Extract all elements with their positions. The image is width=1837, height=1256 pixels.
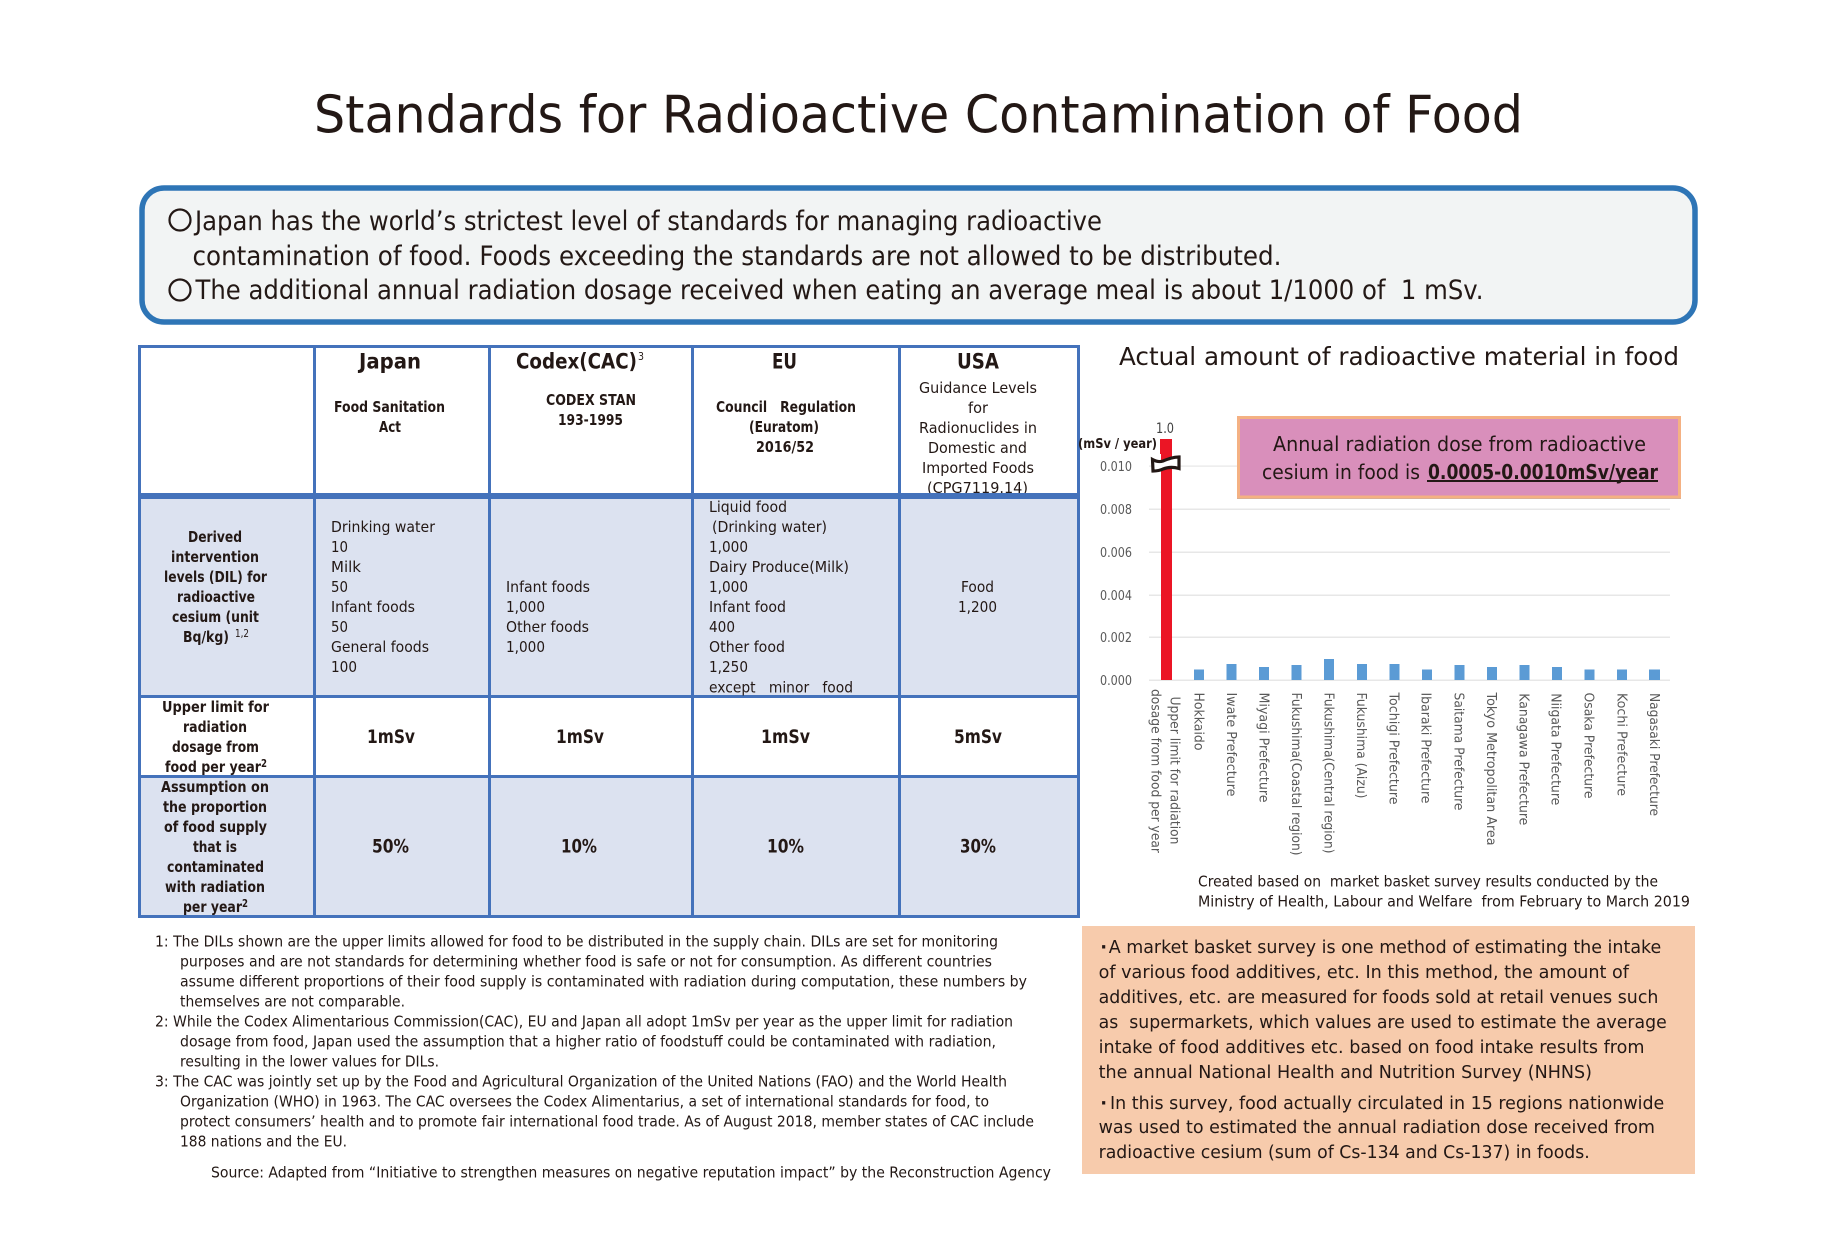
cell: EU DIL values: Infant food bbox=[709, 598, 786, 616]
footnote 2: dosage from food, Japan used the assumption that a higher ratio of foodstuff could be contaminated with radiation, bbox=[180, 1032, 996, 1050]
cell: Codex DIL values: 1,000 bbox=[506, 598, 545, 616]
cell: Japan DIL values: 50 bbox=[331, 618, 348, 636]
cell: Codex DIL values: 1,000 bbox=[506, 638, 545, 656]
row label: upper limit bbox=[162, 698, 270, 776]
paragraph: market basket survey: intake of food additives etc. based on food intake results from bbox=[1099, 1037, 1644, 1058]
paragraph: market basket survey: additives, etc. are measured for foods sold at retail venues such bbox=[1099, 987, 1658, 1008]
header: Codex bbox=[516, 350, 644, 429]
header: Codex: 3 bbox=[638, 351, 644, 363]
footnote 2 bbox=[155, 1012, 1013, 1070]
paragraph: market basket survey bbox=[1099, 937, 1667, 1083]
row label: assumption bbox=[161, 778, 269, 916]
footnote 3: 188 nations and the EU. bbox=[180, 1132, 347, 1150]
bar chart: radiation dose by region bbox=[1078, 421, 1670, 856]
cell: EU DIL values: 1,000 bbox=[709, 538, 748, 556]
cell: Codex DIL values: Other foods bbox=[506, 618, 589, 636]
footnote 2: resulting in the lower values for DILs. bbox=[180, 1052, 439, 1070]
row label: derived intervention levels: Bq/kg) bbox=[183, 628, 229, 646]
cell: EU DIL values: 1,250 bbox=[709, 658, 748, 676]
cell: Japan DIL values: Milk bbox=[331, 558, 361, 576]
panel background bbox=[142, 188, 1695, 322]
footnote 1 bbox=[155, 932, 1027, 1010]
header: EU: EU bbox=[772, 350, 797, 374]
source note: Source: Adapted from “Initiative to strengthen measures on negative reputation impact” by the Reconstruction Agency bbox=[211, 1164, 1051, 1182]
chart source note: Created based on market basket survey results conducted by the bbox=[1198, 872, 1658, 890]
footnote 1: 1: The DILs shown are the upper limits allowed for food to be distributed in the supply chain. DILs are set for monitoring bbox=[155, 932, 998, 950]
cell: Japan DIL values: 100 bbox=[331, 658, 357, 676]
cell: EU DIL values: (Drinking water) bbox=[712, 518, 827, 536]
x axis labels: Osaka Prefecture bbox=[1580, 692, 1596, 798]
footnote 1: themselves are not comparable. bbox=[180, 992, 405, 1010]
table grid bbox=[138, 345, 1080, 918]
row label: derived intervention levels: Derived bbox=[188, 528, 242, 546]
y axis labels: 0.000 bbox=[1100, 673, 1132, 689]
row label: upper limit: 2 bbox=[261, 758, 267, 770]
paragraph: market basket survey: as supermarkets, which values are used to estimate the average bbox=[1099, 1012, 1667, 1033]
row label: derived intervention levels: 1,2 bbox=[235, 628, 249, 640]
y axis labels: 0.006 bbox=[1100, 545, 1132, 561]
y axis labels bbox=[1100, 459, 1132, 689]
paragraph: this survey bbox=[1099, 1093, 1664, 1163]
blue bars: regions bbox=[1194, 659, 1660, 680]
x axis labels: dosage from food per year bbox=[1148, 689, 1164, 853]
row label: assumption: Assumption on bbox=[161, 778, 269, 796]
header: Japan: Japan bbox=[357, 350, 421, 374]
header: Codex: CODEX STAN bbox=[546, 391, 636, 409]
header: USA: for bbox=[968, 399, 989, 417]
callout line 2: cesium in food is bbox=[1262, 460, 1420, 484]
cell: USA upper limit: 5mSv bbox=[954, 727, 1002, 748]
paragraph: this survey: In this survey, food actually circulated in 15 regions nationwide bbox=[1110, 1093, 1664, 1114]
x axis labels bbox=[1148, 689, 1662, 856]
x axis labels: Tochigi Prefecture bbox=[1386, 692, 1402, 805]
cell: Japan DIL values bbox=[331, 518, 436, 676]
header: Codex: Codex(CAC) bbox=[516, 350, 637, 374]
header: USA bbox=[919, 350, 1037, 497]
header: USA: Imported Foods bbox=[922, 459, 1034, 477]
footnote 3: protect consumers’ health and to promote fair international food trade. As of August 2018, member states of CAC include bbox=[180, 1112, 1034, 1130]
chart source note: Ministry of Health, Labour and Welfare from February to March 2019 bbox=[1198, 892, 1690, 910]
header: USA: Guidance Levels bbox=[919, 379, 1037, 397]
y axis labels: 0.002 bbox=[1100, 630, 1132, 646]
cell: USA DIL values: 1,200 bbox=[958, 598, 997, 616]
row label: derived intervention levels: intervention bbox=[171, 548, 259, 566]
row label: assumption: per year bbox=[183, 898, 242, 916]
footnote 3: Organization (WHO) in 1963. The CAC oversees the Codex Alimentarius, a set of international standards for food, to bbox=[180, 1092, 989, 1110]
cell: EU DIL values: Liquid food bbox=[709, 498, 787, 516]
red bar: upper limit bbox=[1160, 439, 1172, 680]
x axis labels: Kochi Prefecture bbox=[1614, 693, 1630, 796]
cell: Japan upper limit: 1mSv bbox=[367, 727, 415, 748]
callout: annual radiation dose bbox=[1237, 418, 1681, 499]
row label: assumption: of food supply bbox=[164, 818, 267, 836]
y axis labels: 0.004 bbox=[1100, 588, 1132, 604]
cell: Japan DIL values: General foods bbox=[331, 638, 429, 656]
row label: assumption: that is bbox=[193, 838, 237, 856]
row label: assumption: with radiation bbox=[165, 878, 265, 896]
row label: upper limit: Upper limit for bbox=[162, 698, 270, 716]
x axis labels: Hokkaido bbox=[1190, 692, 1206, 750]
callout background bbox=[1237, 418, 1681, 499]
axis break symbol bbox=[1152, 457, 1179, 471]
paragraph: this survey: · bbox=[1100, 1093, 1107, 1114]
paragraph: market basket survey: the annual National Health and Nutrition Survey (NHNS) bbox=[1099, 1062, 1592, 1083]
footnotes bbox=[155, 932, 1051, 1182]
message line 2: contamination of food. Foods exceeding the standards are not allowed to be distributed. bbox=[192, 241, 1282, 272]
x axis labels: Fukushima (Aizu) bbox=[1353, 692, 1369, 798]
cell: EU DIL values: 1,000 bbox=[709, 578, 748, 596]
bar value label: 1.0 bbox=[1156, 421, 1174, 437]
x axis labels: Tokyo Metropolitan Area bbox=[1483, 692, 1499, 845]
callout line 1: Annual radiation dose from radioactive bbox=[1273, 432, 1646, 456]
cell: USA DIL values: Food bbox=[961, 578, 994, 596]
cell: EU DIL values: except minor food bbox=[709, 678, 853, 696]
header: EU: Council Regulation bbox=[716, 398, 856, 416]
x axis labels: Fukushima(Central region) bbox=[1320, 692, 1336, 854]
x axis labels: Upper limit for radiation bbox=[1166, 696, 1182, 844]
paragraph: this survey: was used to estimated the annual radiation dose received from bbox=[1099, 1117, 1655, 1138]
icon: bullet circle 1 bbox=[170, 210, 190, 230]
cell: EU DIL values: Dairy Produce(Milk) bbox=[709, 558, 849, 576]
footnote 3: 3: The CAC was jointly set up by the Food and Agricultural Organization of the United Nations (FAO) and the World Health bbox=[155, 1072, 1007, 1090]
x axis labels: Saitama Prefecture bbox=[1450, 692, 1466, 810]
footnote 2: 2: While the Codex Alimentarious Commission(CAC), EU and Japan all adopt 1mSv per year as the upper limit for radiation bbox=[155, 1012, 1013, 1030]
cell: Japan DIL values: Infant foods bbox=[331, 598, 415, 616]
header: Codex: 193-1995 bbox=[558, 411, 623, 429]
cell: USA DIL values bbox=[958, 578, 997, 616]
title: Standards for Radioactive Contamination of Food bbox=[314, 86, 1523, 146]
row label: assumption: 2 bbox=[242, 898, 248, 910]
cell: Japan DIL values: 10 bbox=[331, 538, 348, 556]
cell: EU upper limit: 1mSv bbox=[761, 727, 810, 748]
y axis labels: 0.008 bbox=[1100, 502, 1132, 518]
message line 3: The additional annual radiation dosage received when eating an average meal is about 1/1000 of 1 mSv. bbox=[195, 275, 1484, 306]
x axis labels: Niigata Prefecture bbox=[1548, 693, 1564, 805]
header: Japan: Act bbox=[379, 418, 401, 436]
x axis labels: Ibaraki Prefecture bbox=[1418, 692, 1434, 804]
row label: derived intervention levels: levels (DIL) for bbox=[164, 568, 267, 586]
row label: upper limit: food per year bbox=[165, 758, 261, 776]
footnote 3 bbox=[155, 1072, 1034, 1150]
row label: assumption: the proportion bbox=[163, 798, 267, 816]
header: Japan: Food Sanitation bbox=[334, 398, 445, 416]
x axis labels: Kanagawa Prefecture bbox=[1516, 693, 1532, 825]
cell: Japan assumption: 50% bbox=[372, 836, 409, 858]
x axis labels: Fukushima(Coastal region) bbox=[1288, 692, 1304, 856]
x axis labels: Nagasaki Prefecture bbox=[1646, 693, 1662, 816]
header: USA: USA bbox=[957, 350, 999, 374]
header: USA: (CPG7119.14) bbox=[927, 479, 1028, 497]
footnote 1: assume different proportions of their food supply is contaminated with radiation during computation, these numbers by bbox=[180, 972, 1027, 990]
message line 1: Japan has the world’s strictest level of standards for managing radioactive bbox=[193, 206, 1102, 237]
cell: Japan DIL values: Drinking water bbox=[331, 518, 436, 536]
header: Japan bbox=[334, 350, 445, 436]
cell: USA assumption: 30% bbox=[960, 836, 996, 858]
row label: derived intervention levels: cesium (unit bbox=[172, 608, 259, 626]
header: USA: Radionuclides in bbox=[919, 419, 1037, 437]
chart title: Actual amount of radioactive material in food bbox=[1119, 342, 1679, 371]
cell: Japan DIL values: 50 bbox=[331, 578, 348, 596]
paragraph: this survey: radioactive cesium (sum of Cs-134 and Cs-137) in foods. bbox=[1099, 1142, 1590, 1163]
x axis labels: Iwate Prefecture bbox=[1223, 692, 1239, 796]
chart source note bbox=[1198, 872, 1690, 910]
grid lines bbox=[1149, 466, 1670, 681]
icon: bullet circle 2 bbox=[170, 280, 190, 300]
footnote 1: purposes and are not standards for determining whether food is safe or not for consumption. As different countries bbox=[180, 952, 992, 970]
row label: upper limit: radiation bbox=[183, 718, 247, 736]
cell: Codex DIL values bbox=[506, 578, 590, 656]
callout emphasised value: 0.0005-0.0010mSv/year bbox=[1428, 460, 1659, 484]
paragraph: market basket survey: A market basket survey is one method of estimating the intake bbox=[1109, 937, 1661, 958]
panel background bbox=[1082, 926, 1695, 1174]
y axis unit: (mSv / year) bbox=[1078, 436, 1157, 452]
cell: EU DIL values: 400 bbox=[709, 618, 735, 636]
cell: Codex assumption: 10% bbox=[561, 836, 597, 858]
x axis labels: Miyagi Prefecture bbox=[1255, 692, 1271, 802]
cell: Codex DIL values: Infant foods bbox=[506, 578, 590, 596]
header: EU bbox=[716, 350, 856, 456]
panel: market basket explanation bbox=[1082, 926, 1695, 1174]
row label: upper limit: dosage from bbox=[172, 738, 259, 756]
y axis labels: 0.010 bbox=[1100, 459, 1132, 475]
panel: comparison table bbox=[138, 345, 1080, 918]
panel: key messages bbox=[142, 188, 1695, 322]
header: EU: (Euratom) bbox=[749, 418, 819, 436]
cell: EU DIL values: Other food bbox=[709, 638, 785, 656]
row label: derived intervention levels: radioactive bbox=[177, 588, 255, 606]
cell: Codex upper limit: 1mSv bbox=[556, 727, 604, 748]
header: EU: 2016/52 bbox=[756, 438, 814, 456]
row label: assumption: contaminated bbox=[167, 858, 264, 876]
paragraph: market basket survey: of various food additives, etc. In this method, the amount of bbox=[1099, 962, 1630, 983]
cell: EU assumption: 10% bbox=[767, 836, 804, 858]
row label: derived intervention levels bbox=[164, 528, 267, 646]
paragraph: market basket survey: · bbox=[1100, 937, 1107, 958]
cell: EU DIL values bbox=[709, 498, 853, 696]
header: USA: Domestic and bbox=[928, 439, 1027, 457]
